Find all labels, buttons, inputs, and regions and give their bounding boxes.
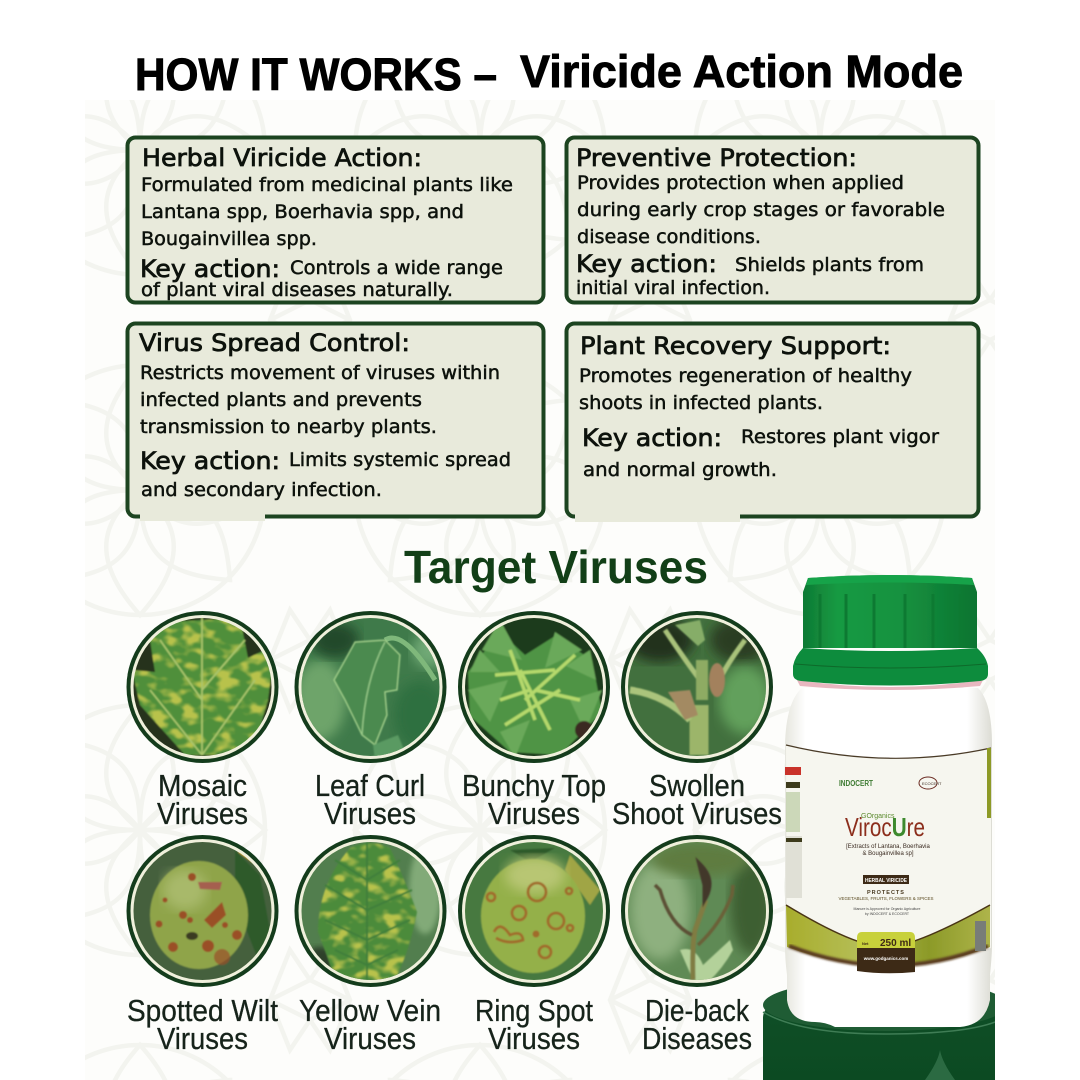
label: ring spot viruses bbox=[475, 993, 593, 1056]
icon: die-back photo bbox=[623, 837, 774, 985]
bottle label: Net bbox=[862, 941, 869, 946]
label: spotted wilt viruses: Viruses bbox=[157, 1021, 248, 1056]
title: Viricide Action Mode bbox=[520, 46, 963, 97]
label: yellow vein viruses bbox=[299, 993, 441, 1056]
label: ring spot viruses: Viruses bbox=[488, 1021, 580, 1056]
bottle label: HERBAL VIRICIDE bbox=[865, 878, 907, 884]
text: key action: Restores plant vigor bbox=[741, 426, 939, 448]
pedestal bbox=[762, 990, 995, 1080]
bottle label: PROTECTS bbox=[867, 890, 905, 896]
text: key action bbox=[140, 447, 511, 501]
bottle cap bbox=[793, 575, 988, 686]
label: die-back diseases: Diseases bbox=[642, 1021, 752, 1056]
product bottle bbox=[785, 575, 992, 1027]
text: herbal viricide description bbox=[141, 174, 513, 250]
text: key action: and secondary infection. bbox=[141, 479, 382, 501]
label: bunchy top viruses: Bunchy Top bbox=[462, 768, 606, 803]
icon: ring spot fruit photo bbox=[460, 837, 608, 985]
text: key action: Shields plants from bbox=[735, 254, 924, 276]
label: swollen shoot viruses: Swollen bbox=[649, 768, 745, 803]
text: key action bbox=[140, 255, 503, 301]
label: die-back diseases bbox=[642, 993, 752, 1056]
heading: plant recovery support: Plant Recovery Support: bbox=[580, 332, 891, 360]
heading: preventive protection: Preventive Protection: bbox=[576, 144, 857, 172]
title bbox=[135, 46, 963, 100]
heading: herbal viricide action: Herbal Viricide Action: bbox=[142, 144, 422, 172]
text: virus spread description: transmission to nearby plants. bbox=[140, 416, 437, 438]
text: preventive description: during early crop stages or favorable bbox=[577, 199, 945, 221]
text: plant recovery description: Promotes regeneration of healthy bbox=[579, 365, 912, 387]
label: swollen shoot viruses bbox=[612, 768, 782, 831]
bottle label: & Bougainvillea sp] bbox=[862, 851, 914, 857]
text: key action bbox=[582, 424, 939, 481]
text: herbal viricide description: Bougainvillea spp. bbox=[141, 228, 317, 250]
label: leaf curl viruses: Viruses bbox=[324, 796, 416, 831]
heading: target viruses: Target Viruses bbox=[404, 541, 708, 593]
text: preventive description: Provides protection when applied bbox=[577, 172, 904, 194]
icon: swollen shoot photo bbox=[623, 613, 771, 761]
bottle label: ECOCERT bbox=[922, 781, 942, 786]
label: yellow vein viruses: Yellow Vein bbox=[299, 993, 441, 1028]
text: virus spread description bbox=[140, 362, 500, 438]
bottle label: 250 ml bbox=[880, 938, 911, 949]
title: HOW IT WORKS – bbox=[135, 49, 497, 100]
bottle label: VirocUre bbox=[845, 812, 925, 842]
text: key action: Key action: bbox=[140, 447, 280, 475]
icon: spotted wilt fruit photo bbox=[128, 837, 276, 985]
label: bunchy top viruses bbox=[462, 768, 606, 831]
label: die-back diseases: Die-back bbox=[645, 993, 749, 1028]
bottle label: www.godganics.com bbox=[863, 956, 908, 961]
bottle label: GOrganics bbox=[861, 813, 895, 820]
panel: plant recovery support bbox=[566, 324, 978, 522]
heading: virus spread control: Virus Spread Control: bbox=[139, 329, 410, 357]
text: plant recovery description: shoots in infected plants. bbox=[579, 392, 823, 414]
label: leaf curl viruses: Leaf Curl bbox=[315, 768, 425, 803]
bottle label: INDOCERT bbox=[839, 779, 873, 788]
panel: herbal viricide action bbox=[128, 138, 544, 302]
label: spotted wilt viruses: Spotted Wilt bbox=[127, 993, 278, 1028]
bottle label bbox=[785, 745, 991, 973]
text: preventive description bbox=[577, 172, 945, 248]
bottle label: VEGETABLES, FRUITS, FLOWERS & SPICES bbox=[839, 896, 933, 901]
text: key action: of plant viral diseases naturally. bbox=[141, 279, 453, 301]
label: leaf curl viruses bbox=[315, 768, 425, 831]
text: virus spread description: infected plants and prevents bbox=[140, 389, 422, 411]
icon: bunchy top photo bbox=[460, 613, 608, 761]
icon: leaf curl photo bbox=[294, 613, 448, 761]
text: key action: and normal growth. bbox=[583, 459, 777, 481]
text: preventive description: disease conditions. bbox=[577, 226, 761, 248]
text: key action: Key action: bbox=[582, 424, 722, 452]
bottle body bbox=[785, 688, 992, 1027]
label: spotted wilt viruses bbox=[127, 993, 278, 1056]
text: key action bbox=[576, 250, 924, 299]
text: herbal viricide description: Formulated from medicinal plants like bbox=[141, 174, 513, 196]
text: herbal viricide description: Lantana spp, Boerhavia spp, and bbox=[141, 201, 464, 223]
text: key action: initial viral infection. bbox=[576, 277, 770, 299]
text: virus spread description: Restricts movement of viruses within bbox=[140, 362, 500, 384]
label: swollen shoot viruses: Shoot Viruses bbox=[612, 796, 782, 831]
label: ring spot viruses: Ring Spot bbox=[475, 993, 593, 1028]
text: key action: Controls a wide range bbox=[290, 257, 503, 279]
bottle neck band bbox=[797, 680, 983, 690]
bottle label: [Extracts of Lantana, Boerhavia bbox=[846, 844, 931, 850]
icon: yellow vein leaf photo bbox=[296, 837, 445, 985]
panel: virus spread control bbox=[128, 324, 544, 521]
label: yellow vein viruses: Viruses bbox=[324, 1021, 416, 1056]
text: plant recovery description bbox=[579, 365, 912, 414]
panel: preventive protection bbox=[566, 138, 978, 302]
label: mosaic viruses: Mosaic bbox=[158, 768, 247, 803]
bottle label: Manure is Approved for Organic Agriculture bbox=[854, 907, 921, 911]
text: key action: Key action: bbox=[140, 255, 280, 283]
text: key action: Key action: bbox=[576, 250, 717, 278]
icon: mosaic virus leaf photo bbox=[128, 613, 276, 761]
label: mosaic viruses: Viruses bbox=[157, 796, 248, 831]
text: key action: Limits systemic spread bbox=[289, 449, 511, 471]
label: bunchy top viruses: Viruses bbox=[488, 796, 580, 831]
bottle label: by INDOCERT & ECOCERT bbox=[865, 912, 910, 916]
label: mosaic viruses bbox=[157, 768, 248, 831]
